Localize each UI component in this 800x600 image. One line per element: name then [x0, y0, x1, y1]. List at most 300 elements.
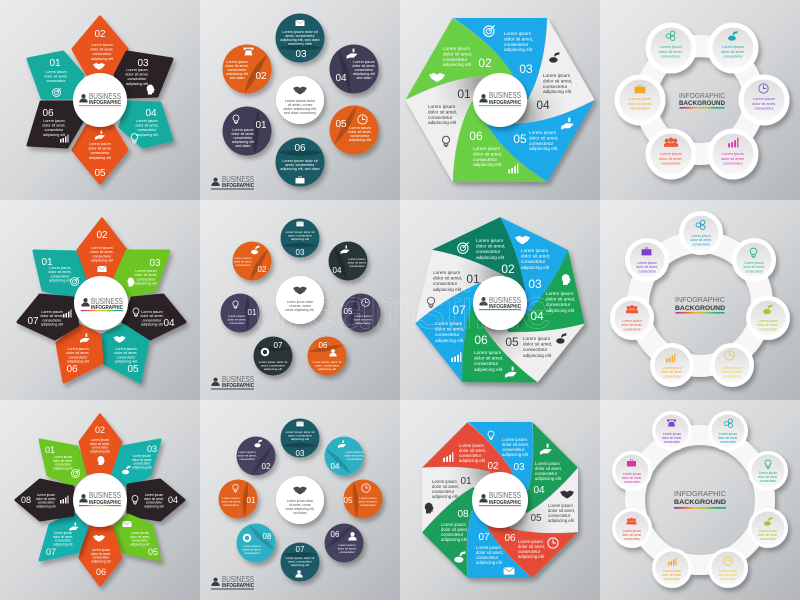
segment 04: consectetur	[546, 302, 571, 307]
center logo: BUSINESS	[489, 91, 521, 100]
petal 07: Lorem ipsum	[41, 310, 63, 314]
segment 05: 05	[505, 335, 519, 349]
segment 07	[435, 303, 466, 362]
petal 02: adipiscing elit	[91, 57, 113, 61]
center circle: Lorem ipsum dolor	[287, 499, 313, 503]
segment 03: Lorem ipsum	[521, 248, 548, 253]
segment 05	[505, 333, 566, 358]
segment 07: dolor sit amet,	[435, 327, 464, 332]
corner logo: INFOGRAPHIC	[222, 583, 254, 589]
circle 05: Lorem ipsum	[359, 496, 377, 500]
ring green: Lorem ipsum	[744, 261, 764, 265]
circle 02: Lorem ipsum	[234, 256, 252, 260]
center logo	[472, 472, 528, 528]
circle 02: dolor sit amet,	[225, 64, 249, 68]
center logo	[73, 473, 127, 527]
petal 08: dolor sit amet,	[36, 497, 56, 501]
circle 06: dolor sit amet,	[338, 546, 357, 550]
circle 03: nonummy nibh	[288, 42, 312, 46]
petal 06: Lorem ipsum	[92, 548, 110, 552]
petal 03: adipiscing elit	[126, 82, 148, 86]
ring purple: Lorem ipsum	[663, 432, 681, 436]
segment 06	[469, 129, 518, 173]
segment 07: 07	[452, 303, 466, 317]
segment 02: adipiscing elit	[476, 255, 505, 260]
petal 05	[113, 515, 160, 560]
segment 01	[428, 87, 471, 146]
circle 04: 04	[335, 73, 347, 84]
segment 08: adipiscing elit	[441, 537, 468, 542]
segment 03: Lorem ipsum	[502, 437, 527, 442]
circle 08: Lorem ipsum	[243, 544, 261, 548]
segment 03: dolor sit amet,	[504, 36, 533, 41]
panel: six circles diagram	[200, 0, 400, 200]
ring green	[752, 454, 784, 488]
circle 07: 07	[296, 545, 305, 554]
circle 05: dolor sit amet,	[359, 500, 378, 504]
petal 05: adipiscing elit	[130, 542, 150, 546]
segment 07: consectetur	[435, 332, 460, 337]
petal 04: Lorem ipsum	[141, 310, 163, 314]
segment 04	[536, 52, 572, 112]
ring teal: consectetur	[720, 440, 737, 444]
ring purple: Lorem ipsum	[637, 261, 657, 265]
ring green: Lorem ipsum	[759, 471, 777, 475]
petal 05: dolor sit amet,	[130, 535, 150, 539]
ring teal: Lorem ipsum	[719, 432, 737, 436]
circle 05: consectetur	[355, 321, 371, 325]
circle 03: adipiscing elit	[291, 437, 309, 441]
circle 01	[222, 106, 272, 156]
center circle: ctetur adipiscing elit,	[286, 308, 315, 312]
petal 06: adipiscing elit	[91, 559, 111, 563]
petal 05: Lorem ipsum	[131, 531, 149, 535]
segment 08: 08	[457, 509, 469, 520]
segment 05: consectetur	[548, 513, 571, 518]
ring magenta	[712, 134, 754, 174]
circle 01: 01	[247, 496, 256, 505]
circle 04: Lorem ipsum	[345, 450, 363, 454]
panel: seven circles diagram	[200, 200, 400, 400]
petal 07: 07	[27, 316, 39, 327]
petal 07: adipiscing elit	[53, 542, 73, 546]
segment 05: adipiscing elit	[523, 353, 552, 358]
petal 08: Lorem ipsum	[37, 493, 55, 497]
petal 06	[57, 325, 102, 382]
segment 01: adipiscing elit	[433, 287, 462, 292]
segment 01: adipiscing elit	[428, 120, 457, 125]
circle 05	[330, 105, 378, 154]
ring orange: dolor sit amet,	[628, 102, 652, 106]
segment 05: consectetur	[529, 141, 554, 146]
ring teal: Lorem ipsum	[722, 45, 744, 49]
ring orange: dolor sit amet,	[661, 370, 683, 374]
ring magenta: consectetur	[723, 162, 744, 166]
circle 06	[324, 524, 364, 562]
ring red: dolor sit amet,	[621, 323, 643, 327]
center circle: sit amet, conse	[289, 304, 311, 308]
segment 01: Lorem ipsum	[433, 270, 460, 275]
center circle: sit amet, conse	[289, 503, 311, 507]
center circle	[276, 476, 324, 524]
petal 02: dolor sit amet,	[90, 250, 114, 254]
circle 07: 07	[274, 341, 283, 350]
petal 01: 01	[41, 257, 53, 268]
segment 04: 04	[533, 485, 545, 496]
segment 06	[474, 333, 517, 378]
segment 02	[429, 46, 492, 82]
ring yellow: Lorem ipsum	[719, 569, 737, 573]
circle 04: 04	[331, 462, 340, 471]
petal 07: adipiscing elit	[41, 323, 63, 327]
segment 06	[504, 533, 558, 559]
segment 01: dolor sit amet,	[432, 484, 459, 489]
petal 07: 07	[46, 547, 56, 557]
segment 06: 06	[504, 533, 516, 544]
circle 07: amet, consectetur	[261, 364, 285, 368]
circle 04: Lorem ipsum	[348, 257, 366, 261]
petal 03	[113, 440, 160, 487]
ring magenta: Lorem ipsum	[623, 472, 641, 476]
center circle: sit amet, conse	[288, 103, 312, 107]
ring magenta: dolor sit amet,	[622, 476, 642, 480]
petal 01: adipiscing elit	[49, 279, 71, 283]
segment 03: 03	[513, 462, 525, 473]
petal 01: dolor sit amet,	[48, 270, 72, 274]
segment 05: dolor sit amet,	[523, 342, 552, 347]
center logo: INFOGRAPHIC	[489, 100, 521, 106]
segment 05: consectetur	[523, 347, 548, 352]
segment 05: Lorem ipsum	[548, 503, 573, 508]
center heading: INFOGRAPHIC	[675, 295, 726, 304]
ring green	[736, 242, 772, 278]
segment 02: adipiscing elit	[459, 458, 486, 463]
petal 03: 03	[147, 444, 157, 454]
petal 04	[120, 102, 172, 147]
circle 05: consectetur	[350, 134, 370, 138]
ring purple	[656, 414, 688, 448]
petal 05: consectetur	[132, 539, 149, 543]
circle 03: 03	[296, 449, 305, 458]
panel: six ring diagram	[600, 0, 800, 200]
segment 06: Lorem ipsum	[473, 146, 500, 151]
circle 05	[342, 294, 380, 332]
segment 07: consectetur	[476, 555, 499, 560]
ring teal: dolor sit amet,	[721, 50, 745, 54]
connecting band	[612, 411, 788, 588]
center logo: BUSINESS	[91, 297, 123, 306]
petal 02: adipiscing elit	[91, 259, 113, 263]
circle 07: Lorem ipsum dolor sit	[259, 360, 287, 364]
segment 04	[533, 444, 562, 496]
petal 02	[78, 219, 126, 278]
petal 04: consectetur	[146, 501, 163, 505]
center heading: INFOGRAPHIC	[679, 91, 726, 100]
petal 01	[34, 251, 88, 297]
segment 02: 02	[487, 461, 499, 472]
petal 04	[128, 480, 184, 520]
petal 01: consectetur	[46, 79, 66, 83]
corner logo	[211, 575, 254, 590]
segment 06: adipiscing elit	[474, 367, 503, 372]
segment 08: dolor sit amet,	[441, 527, 468, 532]
center heading	[674, 489, 727, 509]
petal 06	[80, 527, 121, 585]
circle 01: consectetur	[223, 503, 239, 507]
circle 02: dolor sit amet,	[238, 454, 257, 458]
circle 02: dolor sit amet,	[234, 260, 253, 264]
segment 04: dolor sit amet,	[535, 466, 562, 471]
segment 07: Lorem ipsum	[476, 545, 501, 550]
ring orange	[620, 80, 660, 120]
ring purple: consectetur	[754, 107, 775, 111]
segment 08: Lorem ipsum	[441, 522, 466, 527]
segment 03: Lorem ipsum	[504, 31, 531, 36]
center logo: INFOGRAPHIC	[89, 100, 121, 106]
circle 05: Lorem ipsum	[349, 126, 371, 130]
circle 01: Lorem ipsum	[222, 496, 240, 500]
ring green: dolor sit amet,	[758, 475, 778, 479]
petal 05: dolor sit amet,	[88, 147, 112, 151]
ring orange: consectetur	[630, 107, 651, 111]
segment 05: 05	[513, 132, 527, 146]
petal 02: 02	[96, 230, 108, 241]
ring yellow: consectetur	[723, 374, 742, 378]
ring green: consectetur	[760, 479, 777, 483]
segment 04: 04	[530, 309, 544, 323]
petal 06: adipiscing elit	[43, 133, 65, 137]
segment 02: Lorem ipsum	[443, 46, 470, 51]
segment 02: consectetur	[476, 249, 501, 254]
petal 01: 01	[49, 58, 61, 69]
segment 02: dolor sit amet,	[459, 448, 486, 453]
segment 07: Lorem ipsum	[435, 321, 462, 326]
ring orange: consectetur	[664, 577, 681, 581]
panel: seven ring diagram	[600, 200, 800, 400]
circle 04	[330, 44, 378, 94]
circle 07: amet, consectetur	[288, 560, 312, 564]
circle 06: Lorem ipsum dolor sit	[313, 360, 341, 364]
petal 06: dolor sit amet,	[42, 124, 66, 128]
circle 01: dolor sit amet,	[231, 132, 255, 136]
petal 05: consectetur	[116, 355, 136, 359]
segment 04	[530, 274, 575, 323]
center logo: BUSINESS	[489, 491, 521, 500]
segment 07: adipiscing elit	[435, 338, 464, 343]
center circle	[276, 276, 324, 324]
petal 07: Lorem ipsum	[54, 531, 72, 535]
circle 05: adipiscing elit	[349, 138, 371, 142]
petal 03: dolor sit amet,	[134, 273, 158, 277]
center logo: INFOGRAPHIC	[489, 500, 521, 506]
petal 06: consectetur	[93, 556, 110, 560]
petal 05: consectetur	[90, 151, 110, 155]
panel: hexagon swirl diagram	[400, 0, 600, 200]
circle 06: adipiscing elit, sed diam	[280, 167, 320, 171]
segment 02: adipiscing elit	[443, 62, 472, 67]
segment 04: consectetur	[535, 471, 558, 476]
segment 01: Lorem ipsum	[428, 104, 455, 109]
ring lime	[752, 512, 784, 544]
ring teal: consectetur	[692, 242, 711, 246]
circle 03: Lorem ipsum dolor sit	[286, 230, 314, 234]
petal 03: dolor sit amet,	[125, 73, 149, 77]
ring red: Lorem ipsum	[660, 152, 682, 156]
petal 04: 04	[163, 318, 175, 329]
petal 01: 01	[45, 445, 55, 455]
ring orange	[656, 552, 688, 584]
circle 06: 06	[319, 341, 328, 350]
petal 06: dolor sit amet,	[66, 351, 90, 355]
petal 01: consectetur	[50, 274, 70, 278]
ring purple: dolor sit amet,	[752, 102, 776, 106]
ring red: consectetur	[624, 537, 641, 541]
center circle: Lorem ipsum dolor	[287, 300, 313, 304]
petal 04: adipiscing elit	[144, 504, 164, 508]
petal 04	[123, 295, 185, 339]
circle 01: consectetur	[233, 136, 253, 140]
petal 06: 06	[66, 364, 78, 375]
segment 03: adipiscing elit	[504, 47, 533, 52]
ring teal: consectetur	[723, 55, 744, 59]
petal 01: adipiscing elit	[53, 466, 73, 470]
petal 08	[16, 480, 73, 520]
circle 02: adipiscing elit	[226, 72, 248, 76]
petal 05: adipiscing elit	[89, 156, 111, 160]
circle 02: consectetur	[239, 457, 255, 461]
ring yellow	[712, 552, 744, 584]
circle 02: consectetur	[235, 263, 251, 267]
circle 03	[280, 418, 320, 458]
circle 03: 03	[296, 248, 305, 257]
segment 02: dolor sit amet,	[443, 51, 472, 56]
petal 04: adipiscing elit	[136, 133, 158, 137]
center heading	[679, 91, 726, 109]
circle 02	[232, 242, 272, 281]
segment 06: consectetur	[474, 361, 499, 366]
circle 01: dolor sit amet,	[222, 500, 241, 504]
segment 02: dolor sit amet,	[476, 244, 505, 249]
petal 06: 06	[42, 108, 54, 119]
ring orange: dolor sit amet,	[662, 573, 682, 577]
circle 02	[222, 44, 272, 94]
segment 02: Lorem ipsum	[459, 443, 484, 448]
circle 06: amet, consectetur	[315, 364, 339, 368]
center heading	[675, 295, 726, 314]
circle 03: 03	[295, 49, 307, 60]
circle 01	[218, 480, 258, 518]
center circle: Lorem ipsum dolor	[285, 99, 315, 103]
connecting band	[614, 22, 790, 180]
petal 05: adipiscing elit	[115, 360, 137, 364]
segment 04: Lorem ipsum	[546, 291, 573, 296]
circle 07: Lorem ipsum dolor sit	[286, 556, 314, 560]
circle 02: 02	[255, 71, 267, 82]
ring yellow: consectetur	[720, 577, 737, 581]
ring lime: dolor sit amet,	[757, 323, 779, 327]
petal 03: consectetur	[127, 77, 147, 81]
ring red: Lorem ipsum	[623, 529, 641, 533]
petal 06: Lorem ipsum	[43, 119, 65, 123]
circle 05: consectetur	[360, 503, 376, 507]
petal 01	[40, 440, 87, 485]
petal 02: consectetur	[92, 254, 112, 258]
petal 05: dolor sit amet,	[114, 351, 138, 355]
ring green: dolor sit amet,	[743, 265, 765, 269]
ring orange: consectetur	[663, 374, 682, 378]
circle 01: Lorem ipsum	[228, 314, 246, 318]
ring red: consectetur	[623, 327, 642, 331]
ring green	[650, 28, 692, 68]
panel: octagon swirl diagram	[400, 400, 600, 600]
ring green: Lorem ipsum	[660, 45, 682, 49]
segment 06: adipiscing elit	[518, 554, 545, 559]
circle 04	[328, 242, 368, 281]
segment 05	[513, 118, 574, 151]
segment 03: consectetur	[502, 447, 525, 452]
petal 06	[28, 102, 83, 147]
circle 01: adipiscing elit	[232, 140, 254, 144]
ring purple: consectetur	[638, 269, 657, 273]
petal 03: consectetur	[134, 462, 151, 466]
connecting band	[610, 211, 790, 387]
segment 02: Lorem ipsum	[476, 238, 503, 243]
center circle: ctetur adipiscing elit,	[286, 507, 315, 511]
circle 04: adipiscing elit	[353, 72, 375, 76]
center circle: sed diam nonummy	[284, 111, 316, 115]
petal 04: 04	[145, 108, 157, 119]
circle 06	[276, 138, 324, 186]
ring green: dolor sit amet,	[659, 50, 683, 54]
segment 06: consectetur	[518, 549, 541, 554]
ring lime: consectetur	[759, 327, 778, 331]
segment 02: consectetur	[459, 453, 482, 458]
petal 05: 05	[148, 547, 158, 557]
ring yellow: Lorem ipsum	[722, 366, 742, 370]
ring red	[614, 300, 650, 336]
ring yellow: dolor sit amet,	[718, 573, 738, 577]
petal 04: dolor sit amet,	[140, 314, 164, 318]
circle 06	[308, 336, 346, 376]
segment 06: dolor sit amet,	[473, 151, 502, 156]
petal 05	[73, 126, 127, 183]
center logo	[473, 73, 527, 127]
petal 02: Lorem ipsum	[91, 246, 113, 250]
circle 01: consectetur	[229, 321, 245, 325]
segment 03: dolor sit amet,	[502, 442, 529, 447]
petal 03: Lorem ipsum	[133, 454, 151, 458]
petal 06: dolor sit amet,	[91, 552, 111, 556]
petal 07	[18, 295, 78, 339]
circle 02: consectetur	[227, 68, 247, 72]
center logo: INFOGRAPHIC	[91, 305, 123, 311]
ring lime: consectetur	[760, 537, 777, 541]
petal 04: dolor sit amet,	[144, 497, 164, 501]
center logo	[473, 276, 527, 330]
circle 04: Lorem ipsum	[353, 60, 375, 64]
petal 02: adipiscing elit	[90, 449, 110, 453]
segment 05: adipiscing elit	[529, 146, 558, 151]
center heading: BACKGROUND	[675, 305, 725, 312]
segment 07: adipiscing elit	[476, 560, 503, 565]
segment 01: adipiscing elit	[432, 494, 459, 499]
circle 03: Lorem ipsum dolor sit	[286, 430, 314, 434]
center heading: BACKGROUND	[679, 100, 725, 107]
segment 03: adipiscing elit	[502, 452, 529, 457]
segment 05: dolor sit amet,	[548, 508, 575, 513]
circle 05: dolor sit amet,	[354, 318, 373, 322]
segment 05: Lorem ipsum	[529, 130, 556, 135]
